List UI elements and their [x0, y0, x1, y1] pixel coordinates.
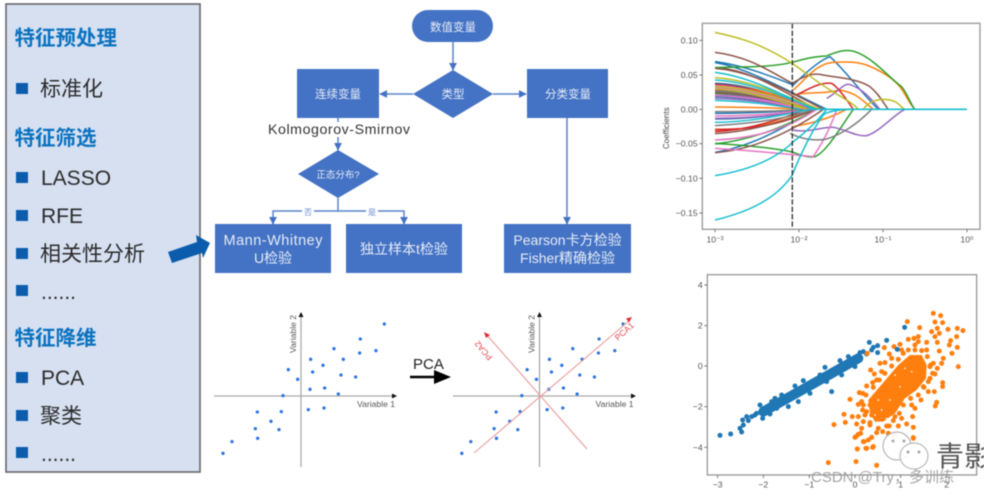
- y axis ticks: −0.15: [676, 208, 698, 218]
- node: Mann-Whitney: U检验: [254, 250, 292, 266]
- x axis ticks: 1: [898, 479, 903, 489]
- branch label: yes: 是: [368, 208, 376, 217]
- x axis ticks: 2: [944, 479, 949, 489]
- axis label: variable 1: Variable 1: [596, 399, 634, 409]
- y axis ticks: −4: [693, 442, 703, 452]
- chart: PCA rotated axes: [453, 312, 636, 467]
- heading: feature selection: 特征筛选: [14, 126, 96, 150]
- list item: RFE: [16, 205, 83, 228]
- list item: RFE: RFE: [41, 205, 83, 228]
- watermark: WeChat icon: [883, 432, 928, 469]
- y axis ticks: −0.10: [676, 173, 698, 183]
- list item: ellipsis: [16, 281, 76, 304]
- PCA1 and PCA2 axes: [474, 320, 630, 453]
- branch label: no: 否: [304, 208, 312, 217]
- list item: PCA: [16, 367, 84, 390]
- y axis label: Coefficients: [662, 107, 671, 149]
- list item: ellipsis: [16, 443, 76, 466]
- node: categorical variable: 分类变量: [545, 87, 591, 101]
- x axis ticks: [706, 234, 974, 244]
- list item: standardization: 标准化: [40, 78, 103, 101]
- x axis ticks: −3: [713, 479, 723, 489]
- orange class points: [828, 313, 963, 465]
- node: numeric variable: [412, 10, 493, 42]
- branch label: yes: [366, 206, 378, 217]
- y axis ticks: 0.00: [681, 104, 698, 114]
- flowchart: [215, 10, 631, 273]
- coefficient lines: [715, 32, 967, 220]
- label: PCA2: PCA2: [472, 339, 495, 362]
- node: independent t-test: [346, 224, 462, 273]
- arrow: PCA transform: [410, 356, 451, 384]
- node: Pearson and Fisher tests: [504, 224, 631, 273]
- boundary orange point: [860, 346, 875, 361]
- x axis ticks: 10⁻¹: [874, 234, 892, 244]
- x axis ticks: [713, 479, 949, 489]
- list item: ellipsis: ......: [41, 443, 76, 466]
- label: Kolmogorov-Smirnov: Kolmogorov-Smirnov: [268, 122, 411, 138]
- data points: [462, 324, 623, 453]
- label: PCA1: PCA1: [613, 320, 636, 342]
- node: continuous variable: [297, 69, 379, 118]
- node: Mann-Whitney: Mann-Whitney: [224, 233, 323, 249]
- dashed alpha line: [790, 23, 794, 230]
- chart: original variable axes: [214, 312, 397, 467]
- node: normality decision: 正态分布?: [316, 169, 360, 181]
- y axis ticks: 0: [698, 361, 703, 371]
- list item: correlation analysis: 相关性分析: [40, 243, 145, 266]
- node: normality decision: [298, 150, 379, 198]
- chart: LASSO coefficient paths: [662, 23, 980, 244]
- x axis ticks: −1: [804, 479, 814, 489]
- chart: two-class scatter plot: [693, 275, 977, 489]
- data points: [223, 324, 384, 453]
- list item: clustering: 聚类: [40, 405, 82, 428]
- plot frame: [702, 23, 980, 229]
- node: Pearson and Fisher tests: Fisher精确检验: [520, 250, 615, 266]
- arrow: PCA transform: PCA: [413, 356, 444, 373]
- arrow: list to flowchart: [168, 235, 210, 263]
- axis label: variable 2: Variable 2: [526, 315, 536, 353]
- node: Pearson and Fisher tests: Pearson卡方检验: [513, 232, 622, 248]
- y axis ticks: [676, 35, 698, 218]
- x axis ticks: 10⁻²: [790, 234, 808, 244]
- y axis ticks: −2: [693, 402, 703, 412]
- plot frame: [707, 275, 977, 475]
- x axis ticks: 0: [853, 479, 858, 489]
- node: categorical variable: [527, 69, 608, 118]
- y axis ticks: 0.05: [681, 70, 698, 80]
- y axis ticks: 0.10: [681, 35, 698, 45]
- heading: dimensionality reduction: 特征降维: [14, 327, 96, 350]
- node: numeric variable: 数值变量: [430, 20, 476, 34]
- axis label: variable 1: Variable 1: [357, 399, 395, 409]
- x axis ticks: 10⁰: [960, 234, 974, 244]
- node: independent t-test: 独立样本t检验: [360, 241, 448, 257]
- y axis ticks: −0.05: [676, 139, 698, 149]
- list item: clustering: [16, 405, 82, 428]
- y axis ticks: 2: [698, 321, 703, 331]
- watermark: CSDN credit: CSDN @Try，多训练: [811, 469, 954, 486]
- x axis ticks: 10⁻³: [706, 234, 724, 244]
- node: Mann-Whitney: [215, 224, 331, 273]
- list item: PCA: PCA: [41, 367, 84, 390]
- list item: LASSO: LASSO: [41, 167, 111, 190]
- y axis ticks: 4: [698, 280, 703, 290]
- node: type decision: [413, 70, 493, 118]
- branch label: no: [302, 206, 314, 217]
- node: continuous variable: 连续变量: [315, 87, 361, 101]
- node: type decision: 类型: [442, 87, 464, 101]
- axis label: variable 2: Variable 2: [288, 315, 298, 353]
- x axis ticks: −2: [758, 479, 768, 489]
- panel: feature engineering list: [6, 4, 200, 472]
- y axis ticks: [693, 280, 703, 452]
- heading: preprocessing: 特征预处理: [14, 27, 117, 50]
- blue class points: [720, 327, 905, 435]
- list item: ellipsis: ......: [41, 281, 76, 304]
